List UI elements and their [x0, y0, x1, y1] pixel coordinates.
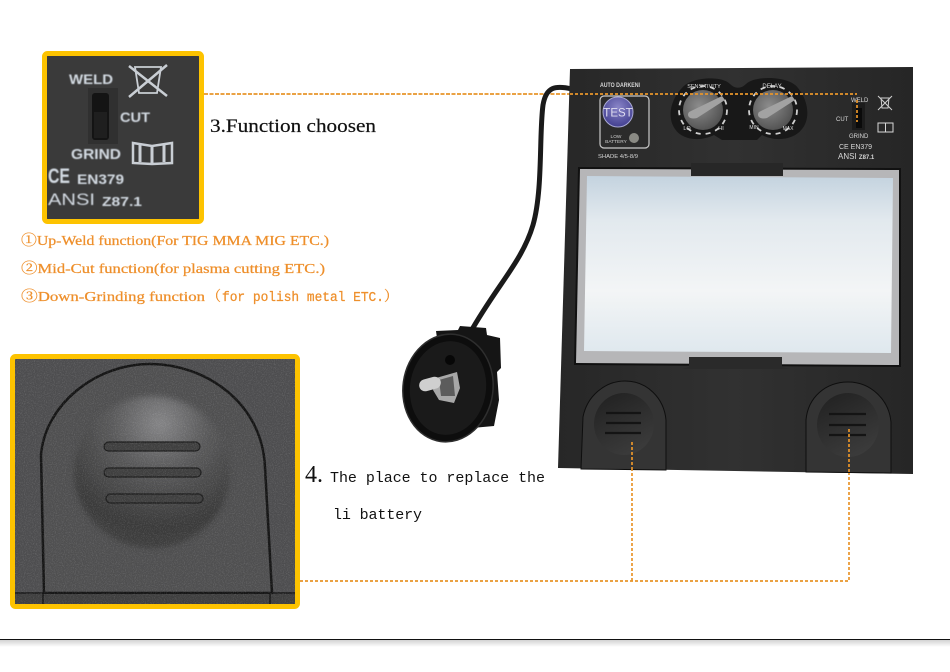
- mode labels: GRIND: [849, 134, 869, 140]
- icon: open book: [133, 143, 172, 164]
- switch labels: CUT: [120, 109, 150, 125]
- test panel: BATTERY: [605, 139, 628, 145]
- caption: battery location: li battery: [333, 507, 422, 524]
- switch labels: CE: [48, 165, 70, 188]
- connector: function switch to helmet: [204, 94, 857, 120]
- panel: battery cover close-up: [12, 356, 298, 606]
- top labels: SHADE 4/5-8/9: [598, 154, 638, 160]
- sensitivity dial: LO: [683, 126, 691, 132]
- caption: battery location: [305, 462, 545, 524]
- caption: battery location: The place to replace the: [330, 470, 545, 487]
- left battery cover: [581, 381, 666, 470]
- panel: function switch close-up: [44, 54, 202, 222]
- bottom ledge: [15, 593, 295, 604]
- connector overlays on helmet: [570, 94, 857, 473]
- bottom tab: [682, 357, 790, 369]
- sensor disc: [396, 328, 500, 448]
- item 3: ）: [384, 289, 398, 305]
- item 3: for polish metal ETC.: [222, 291, 384, 306]
- switch slot: [88, 88, 118, 144]
- delay dial: MAX: [783, 126, 794, 132]
- item 3: [21, 289, 398, 306]
- delay dial: DELAY: [762, 84, 782, 90]
- icon: crossed-out bin: [129, 65, 167, 97]
- mode labels: WELD: [851, 98, 869, 104]
- icon: small crossed bin: [878, 96, 892, 110]
- top tab: [691, 163, 783, 176]
- sensor button: [445, 355, 455, 365]
- heading: function chosen: 3.Function choosen: [210, 116, 377, 137]
- delay dial: MIN: [749, 125, 759, 131]
- test button: [603, 97, 633, 127]
- dome recess: [74, 396, 230, 548]
- switch labels: [48, 71, 150, 209]
- cable: [470, 87, 572, 333]
- mode switch: [852, 103, 865, 130]
- switch labels: Z87.1: [102, 194, 142, 209]
- sensitivity dial: HI: [718, 126, 724, 132]
- list: function modes: [21, 233, 398, 306]
- sensor bolt: [418, 372, 460, 403]
- mode labels: [836, 98, 875, 161]
- sensor housing: [436, 326, 501, 430]
- caption: battery location: 4.: [305, 462, 323, 488]
- ridges: [104, 442, 203, 503]
- mode labels: ANSI Z87.1: [838, 152, 875, 161]
- sensitivity dial: SENSITIVITY: [687, 84, 721, 90]
- item 2: ②Mid-Cut function(for plasma cutting ETC.): [21, 261, 325, 277]
- top labels: [598, 82, 640, 160]
- item 3: ③Down-Grinding function: [21, 289, 205, 305]
- connector: battery close-up to helmet covers: [300, 429, 849, 581]
- icon: small book: [878, 123, 893, 132]
- switch labels: GRIND: [71, 147, 121, 163]
- viewing window: [574, 167, 901, 367]
- switch labels: WELD: [69, 71, 113, 87]
- delay dial: [749, 84, 797, 134]
- test panel: TEST: [603, 108, 633, 120]
- switch labels: EN379: [77, 172, 124, 187]
- control dial housing: [671, 78, 807, 140]
- switch labels: ANSI: [48, 190, 95, 209]
- helmet filter cartridge: [558, 67, 913, 474]
- right battery cover: [806, 382, 891, 473]
- footer divider: [0, 639, 950, 647]
- item 1: ①Up-Weld function(For TIG MMA MIG ETC.): [21, 233, 329, 249]
- top labels: AUTO DARKENI: [600, 82, 640, 89]
- test panel: [600, 96, 649, 148]
- sensor module: [396, 326, 501, 448]
- cartridge body: [558, 67, 913, 474]
- low battery label: LOW: [611, 134, 622, 140]
- battery cover shape: [41, 364, 272, 593]
- item 3: （: [207, 289, 221, 305]
- mode labels: CUT: [836, 117, 849, 123]
- sensitivity dial: [679, 84, 727, 134]
- mode labels: CE EN379: [839, 144, 872, 151]
